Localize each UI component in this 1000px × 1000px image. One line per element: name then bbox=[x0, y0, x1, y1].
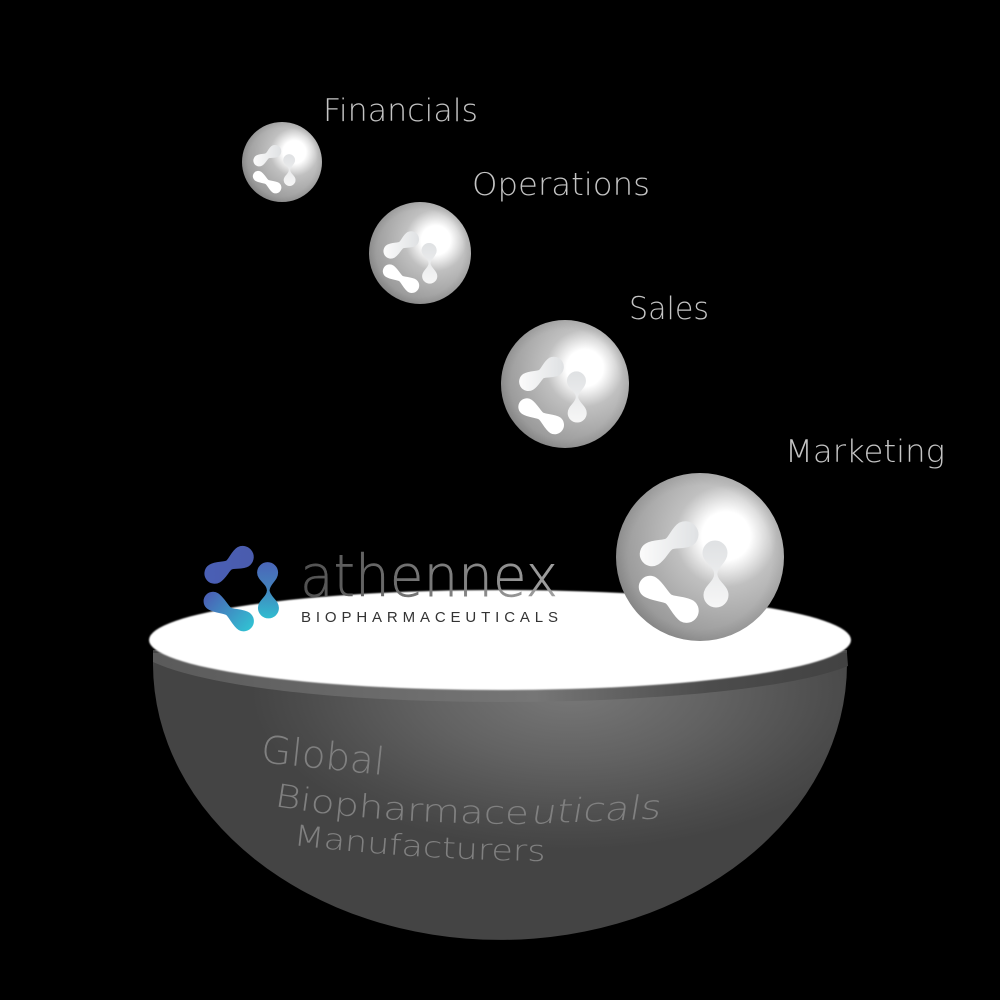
label: Sales: Sales bbox=[629, 291, 709, 327]
logo mark bbox=[205, 547, 279, 630]
tagline: Biopharmaceuticals: BIOPHARMACEUTICALS bbox=[301, 609, 558, 626]
wordmark: athennex: athennex bbox=[300, 542, 558, 610]
text: Manufacturers: Manufacturers bbox=[298, 824, 543, 862]
bowl bbox=[149, 590, 851, 940]
sphere: Financials bbox=[242, 122, 322, 202]
label: Marketing: Marketing bbox=[785, 434, 945, 470]
sphere: Marketing bbox=[616, 473, 784, 641]
bowl rim band bbox=[153, 653, 848, 702]
sphere: Operations bbox=[369, 202, 471, 304]
text: Biopharmace: Biopharmace bbox=[278, 784, 526, 824]
text: uticals: uticals bbox=[529, 787, 665, 832]
athennex logo bbox=[205, 542, 558, 630]
white bowl top bbox=[149, 590, 851, 690]
label: Financials: Financials bbox=[323, 93, 478, 129]
bowl text: Global Biopharmaceuticals Manufacturers bbox=[259, 727, 665, 862]
label: Operations: Operations bbox=[472, 167, 650, 203]
text: Global: Global bbox=[259, 727, 387, 784]
bowl body bbox=[153, 650, 847, 940]
sphere: Sales bbox=[501, 320, 629, 448]
